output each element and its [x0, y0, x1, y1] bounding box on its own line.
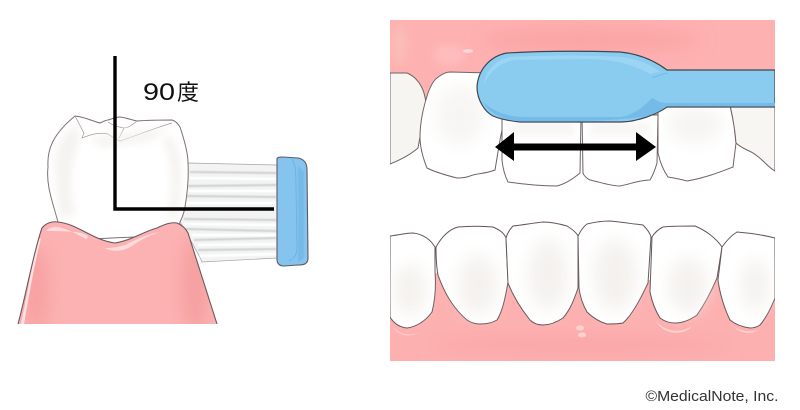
upper gum [390, 20, 775, 115]
gum [18, 222, 217, 335]
90 degree angle lines [115, 56, 274, 209]
panel: side view of tooth with brush at 90 degrees [18, 56, 308, 335]
panel: front view of teeth with brush [390, 20, 775, 361]
lower teeth [390, 221, 775, 328]
label: 90度: 90 [143, 79, 175, 106]
toothbrush bristles [180, 163, 277, 262]
molar tooth [48, 116, 188, 240]
toothbrush head, side view [277, 157, 308, 266]
double-headed arrow [495, 132, 656, 161]
upper teeth [390, 72, 775, 186]
copyright text: ©MedicalNote, Inc. [646, 389, 778, 405]
label: 90度: 度 [177, 80, 199, 105]
label: 90度 [143, 79, 199, 106]
lower gum [390, 272, 775, 361]
toothbrush, front view [477, 51, 775, 122]
